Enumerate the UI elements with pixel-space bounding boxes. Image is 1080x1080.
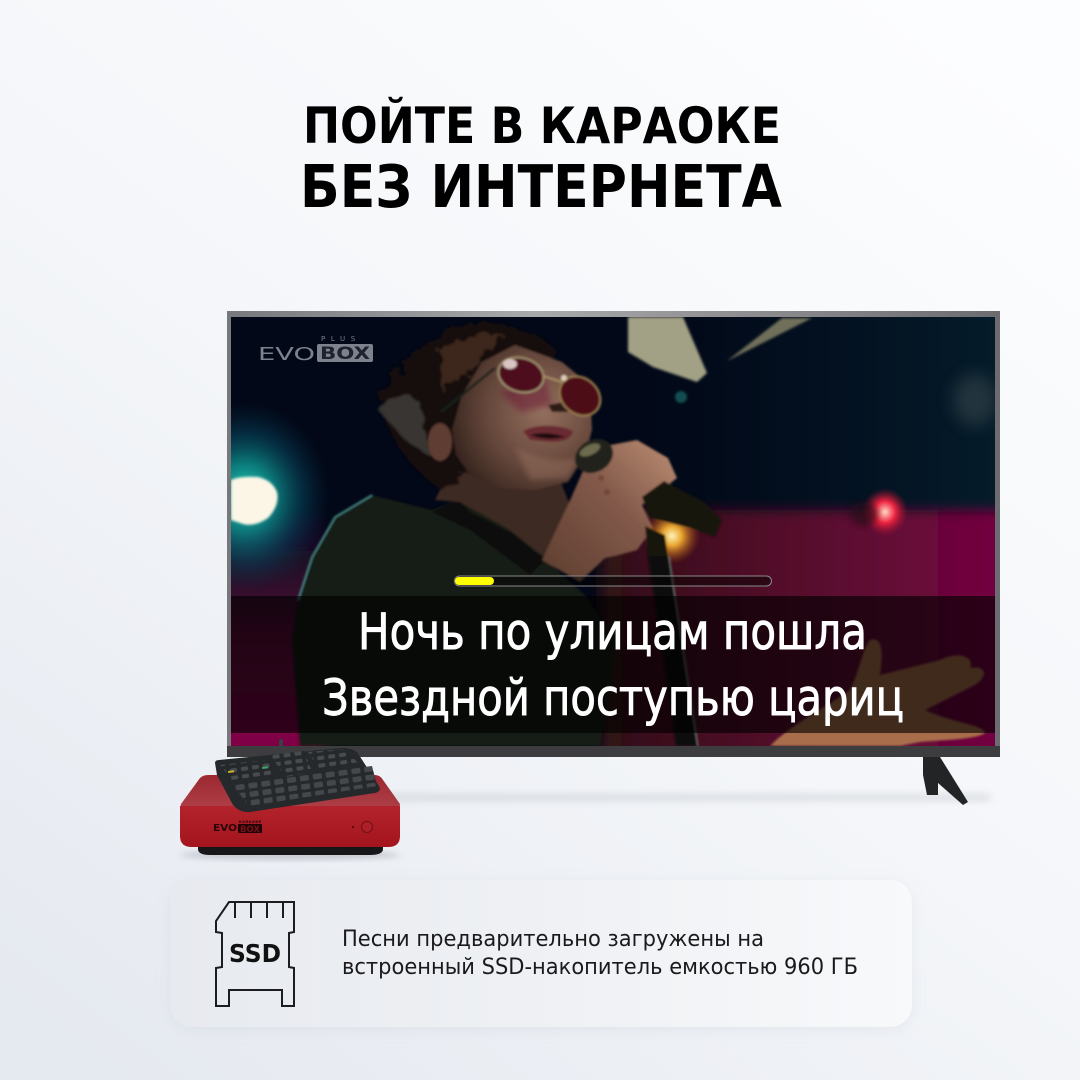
lyrics: Звездной поступью цариц <box>322 669 904 727</box>
title <box>300 96 782 221</box>
mouth <box>523 426 573 442</box>
remote control <box>215 739 380 812</box>
icon: ssd card <box>216 902 294 1006</box>
box top <box>181 775 400 807</box>
box logo: BOX <box>240 825 260 835</box>
set-top box and remote <box>180 739 400 860</box>
lyrics <box>322 603 904 727</box>
stage lights <box>231 317 995 746</box>
television <box>227 311 1000 805</box>
tv stand leg <box>923 757 968 805</box>
lyrics band <box>231 596 995 733</box>
hair <box>380 323 558 490</box>
ear <box>428 423 452 461</box>
box logo: KARAOKE <box>239 820 262 824</box>
info card <box>170 880 912 1027</box>
evobox logo <box>260 336 373 362</box>
progress bar <box>454 576 772 586</box>
lower open hand <box>770 639 985 746</box>
description text: встроенный SSD-накопитель емкостью 960 ГБ <box>342 955 858 980</box>
tv frame <box>227 311 1000 757</box>
microphone <box>569 432 722 746</box>
description text <box>342 927 858 980</box>
box front <box>180 806 400 847</box>
title: ПОЙТЕ В КАРАОКЕ <box>303 96 781 155</box>
evobox logo: BOX <box>320 344 370 364</box>
description text: Песни предварительно загружены на <box>342 927 764 952</box>
box logo: EVO <box>213 823 237 834</box>
neck <box>435 470 572 558</box>
lyrics: Ночь по улицам пошла <box>358 603 867 661</box>
box logo <box>213 820 262 835</box>
box base <box>198 846 383 855</box>
box shadow <box>180 850 400 860</box>
evobox logo: PLUS <box>321 335 361 343</box>
icon: ssd card: SSD <box>229 939 281 968</box>
title: БЕЗ ИНТЕРНЕТА <box>300 152 782 221</box>
face <box>452 345 592 490</box>
video frame with singer <box>231 317 995 746</box>
singer shirt <box>292 495 615 746</box>
box button <box>362 822 372 832</box>
forearm and singing hand <box>542 440 677 582</box>
singer figure <box>292 323 985 746</box>
evobox logo: EVO <box>258 344 315 365</box>
sunglasses <box>440 355 603 418</box>
floor shadow <box>310 795 990 800</box>
